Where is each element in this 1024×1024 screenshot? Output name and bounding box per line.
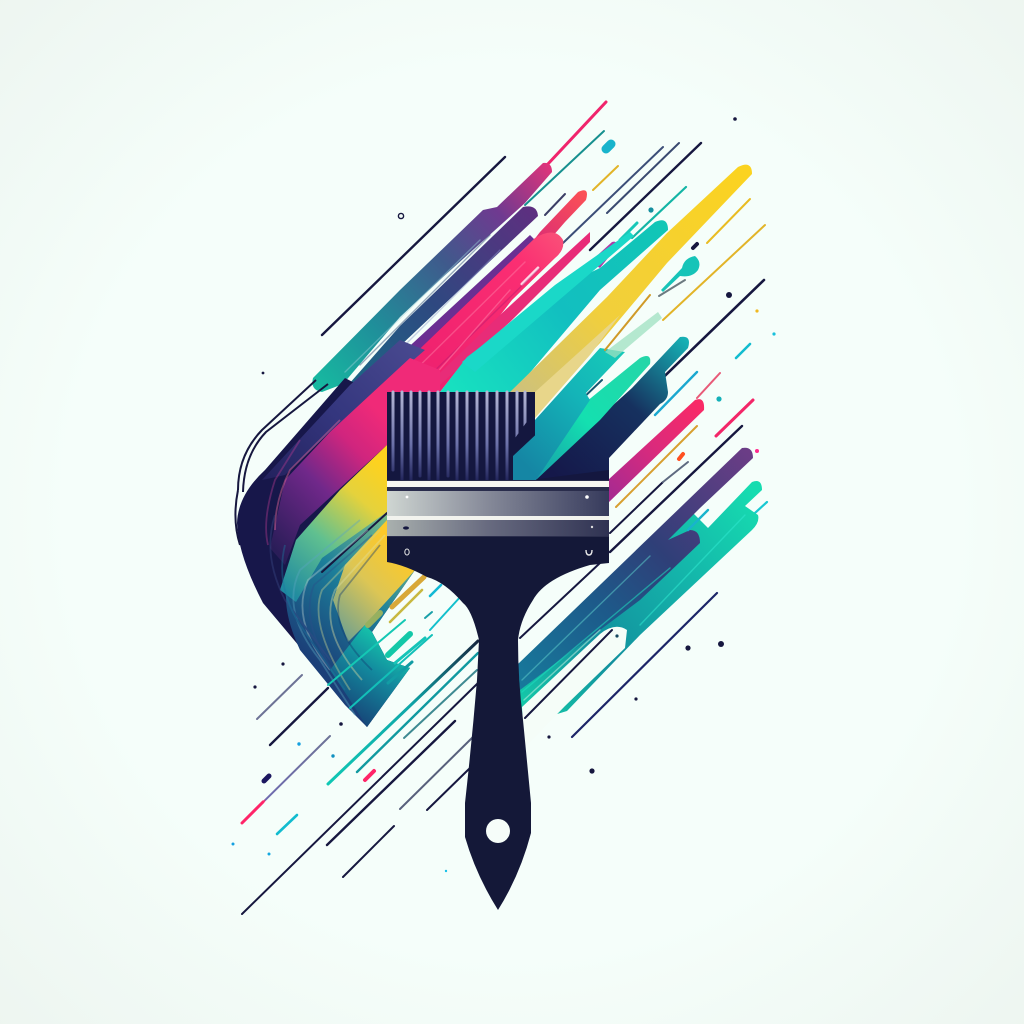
cyan gap line [688,510,708,530]
yellow pale wedge [535,315,620,418]
splatter dots and blobs [232,117,776,872]
lower stroke: notch [522,627,627,748]
cyan pill [606,144,611,149]
swoosh outline lines [235,380,328,545]
stroke: navy to purple [342,206,538,395]
stroke: purple edge [350,235,535,410]
swoosh cyan lines [328,620,405,685]
stroke: pink lower [608,399,704,503]
handle body [387,536,609,910]
swoosh dark line [322,513,387,572]
handle hole [486,819,510,843]
swoosh teal base [330,625,410,727]
stroke: yellow [510,165,752,412]
swoosh streaks [266,420,385,715]
bristles [387,392,609,482]
highlight cut [522,268,538,284]
teal band below yellow [510,348,625,472]
ferrule rivets [406,496,408,498]
swoosh base [237,378,415,727]
swoosh blue ribbon [286,490,415,727]
swoosh yellow ribbon [280,445,387,602]
paint over right bristles [513,392,590,480]
stroke: teal to purple to pink [312,163,552,392]
lower stroke: navy line through notch [525,630,612,718]
divider line [512,380,602,466]
navy dash [693,244,697,248]
handle [387,480,609,910]
pale green streak [605,312,662,358]
lower right stroke group [518,448,762,748]
swoosh lower yellow ribbon [333,520,415,642]
lower stroke texture [522,515,745,700]
texture on top strokes [345,235,540,420]
stroke: red tip [420,190,587,392]
left swoosh [235,340,462,727]
stroke: pink [360,232,563,445]
lower stroke: teal [518,481,762,725]
teal dot [648,207,654,213]
gold line [605,295,650,350]
stroke: pink sliver [420,232,590,392]
swoosh drips [368,577,462,683]
grey dash [659,280,685,296]
stroke: green [520,356,650,480]
lines behind the brush [242,102,767,914]
paint strokes fanning to the top right [312,163,616,445]
stroke: purple sliver tip [590,242,616,268]
lower stroke: purple to blue [518,448,753,690]
swoosh blue and purple ribbon [262,340,425,480]
bristle right corner [510,392,609,482]
stroke: navy block with teal tip [530,337,689,482]
bristle highlights [393,392,525,480]
swoosh magenta ribbon [270,358,440,565]
stroke: cyan streak [462,232,634,372]
stroke: teal [440,220,668,396]
teal drop [661,256,699,292]
ferrule [387,480,609,555]
